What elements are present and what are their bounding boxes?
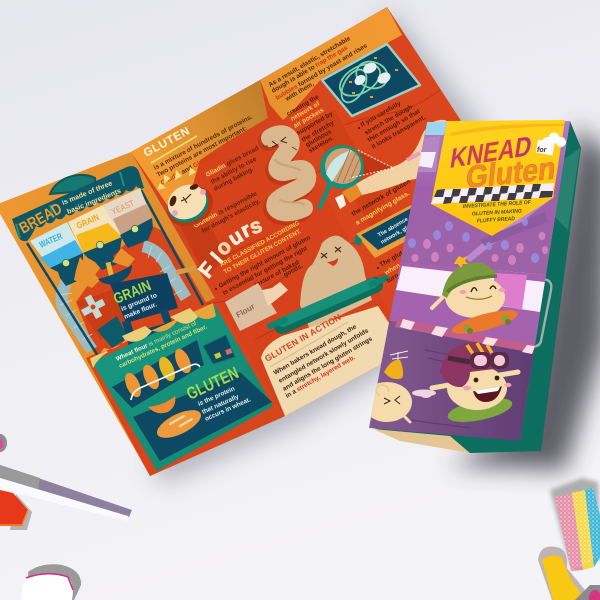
candy: marshmallow bbox=[22, 564, 81, 600]
text: is the protein bbox=[197, 385, 252, 423]
awning body bbox=[12, 166, 144, 241]
closed brochure bbox=[362, 120, 581, 453]
text: getting the right amount: texture of baked bbox=[254, 259, 300, 289]
text: if you carefully: stretch the dough bbox=[364, 104, 414, 137]
callout: the absence bbox=[354, 195, 445, 258]
cream scallops bbox=[90, 308, 198, 368]
text: the gluten when: turn bbox=[386, 272, 400, 285]
heading underline bbox=[270, 322, 348, 367]
windmill bbox=[81, 295, 105, 319]
green board bbox=[446, 393, 514, 427]
diagonal girder bbox=[465, 190, 555, 262]
bread heading awning bbox=[12, 166, 144, 241]
heading: Flours: l bbox=[207, 248, 228, 268]
market stall awning bbox=[90, 303, 216, 368]
banner highlights bbox=[450, 124, 564, 136]
text: gliadin: during baking. bbox=[213, 166, 255, 193]
face bbox=[384, 396, 400, 404]
text: when bakers knead: in a stretchy, layered web. bbox=[284, 354, 357, 400]
subtitle bbox=[463, 200, 532, 224]
hoppers bbox=[50, 218, 153, 286]
text: the gluten when bbox=[377, 246, 411, 285]
panel 3 top text: with them, bbox=[284, 81, 315, 103]
text: is the protein: is the protein bbox=[197, 385, 236, 408]
red fold shade bbox=[310, 110, 392, 226]
text: when bakers knead: When bakers knead dough, the bbox=[272, 323, 358, 377]
panel 2 heading: GLUTEN: GLUTEN bbox=[142, 125, 192, 160]
helmet bbox=[440, 342, 502, 387]
subtitle: FLUFFY BREAD bbox=[477, 216, 515, 224]
subheading: classified according: TO THEIR GLUTEN CONTENT. bbox=[223, 228, 303, 276]
icon: magnifying glass bbox=[320, 145, 393, 207]
face bbox=[463, 376, 512, 402]
candy: pink gummy bbox=[575, 585, 600, 600]
heading: Flours: F bbox=[194, 258, 220, 283]
text: if you carefully: If you carefully bbox=[360, 100, 402, 129]
callout: the absence: The absence of a bbox=[377, 210, 420, 239]
text: is the protein: occurs in wheat. bbox=[204, 396, 252, 423]
rotor bbox=[390, 351, 408, 360]
text: creating the network: creating the bbox=[286, 93, 321, 118]
cream page edge bbox=[373, 429, 470, 453]
text: gluten intro: is a mixture of hundreds of proteins. bbox=[153, 113, 254, 172]
text: creating the network: the stretchy bbox=[300, 119, 336, 144]
text: wheat flour: carbohydrates, protein and fiber. bbox=[118, 323, 209, 370]
grinder funnel bbox=[98, 265, 132, 284]
loaves bbox=[122, 346, 200, 400]
mill legs bbox=[122, 308, 175, 350]
panel 3 top text: As a result, elastic, stretchable bbox=[267, 35, 352, 89]
icon: dough with X eyes bbox=[300, 236, 372, 330]
text: the gluten when: The gluten bbox=[378, 246, 411, 269]
heading: GLUTEN: GLUTEN bbox=[184, 363, 242, 404]
box: gluten definition bbox=[133, 372, 272, 461]
panel: trapping gas background bbox=[260, 7, 480, 365]
text: gluten intro: Two proteins are most important: bbox=[156, 125, 248, 179]
sky corner bbox=[425, 122, 447, 135]
text: if you carefully: thin enough so that bbox=[366, 108, 422, 144]
text: getting the right amount: Getting the right amount of gluten bbox=[218, 234, 312, 290]
golden grain stream bbox=[106, 262, 114, 276]
drone cap bbox=[384, 360, 403, 379]
icon: flour bag bbox=[225, 282, 288, 331]
text: is made of three basic ingredients: is made of three bbox=[61, 180, 114, 207]
panel 3 top text: dough is able to trap the gas bbox=[270, 44, 349, 95]
orange header area of panel 2 bbox=[131, 80, 268, 212]
heading: BREAD: BREAD bbox=[17, 200, 65, 237]
white wall stripe bbox=[396, 266, 545, 312]
body bbox=[371, 382, 412, 422]
body bbox=[447, 366, 507, 410]
arm bbox=[403, 416, 412, 424]
heading: GRAIN: GRAIN bbox=[111, 277, 154, 308]
text: when bakers knead bbox=[272, 323, 374, 400]
text: creating the network: supported by bbox=[296, 110, 334, 137]
back of brochure: teal spine bbox=[373, 121, 581, 453]
text: if you carefully bbox=[358, 100, 427, 151]
grey pipes bbox=[61, 246, 186, 350]
tank: water: WATER bbox=[38, 231, 64, 250]
heading: Flours: s bbox=[246, 214, 265, 239]
text: the network of gluten: the network of gluten bbox=[350, 178, 412, 218]
kerb stripes bbox=[395, 318, 535, 353]
heading: gluten in action: GLUTEN IN ACTION bbox=[263, 312, 343, 364]
icon: rising yellow arrows bbox=[157, 167, 196, 190]
helmet stripes bbox=[467, 343, 492, 354]
text: gliadin: the ability to rise bbox=[210, 156, 258, 186]
spine shading bbox=[548, 148, 580, 230]
pompom bbox=[454, 256, 468, 268]
grid panel bbox=[203, 335, 235, 364]
goggles bbox=[448, 352, 509, 369]
awning sign dome bbox=[50, 175, 96, 194]
icon: stretchy dough ribbon bbox=[268, 134, 307, 215]
panel: ingredients background bbox=[0, 152, 283, 476]
candy: rainbow strip bbox=[550, 478, 600, 571]
tank: yeast bbox=[103, 188, 152, 237]
gluten strands and bubbles bbox=[334, 57, 398, 107]
support posts bbox=[27, 190, 203, 372]
candy: yellow gummy bear bbox=[538, 546, 585, 600]
icon: smiling dough ball bbox=[160, 178, 220, 234]
small mill house bbox=[97, 316, 128, 348]
drop shadows bbox=[150, 12, 600, 484]
title: Gluten: Gluten bbox=[464, 150, 557, 195]
text: when bakers knead: entangled network slowly unfolds bbox=[278, 327, 370, 385]
candy: red gummy bbox=[0, 490, 32, 530]
mill crank handle bbox=[178, 268, 194, 272]
elastic strap bbox=[530, 279, 551, 346]
cover lower dark road bbox=[369, 320, 535, 441]
tank: grain bbox=[68, 205, 122, 253]
text: is ground to make flour: is ground to bbox=[120, 292, 158, 313]
heading: Flours: r bbox=[237, 218, 254, 243]
title: KNEAD: KNEAD bbox=[448, 130, 534, 174]
numbered markers bbox=[62, 225, 139, 267]
tank: grain: GRAIN bbox=[75, 212, 101, 231]
panel 3 top text: bubbles formed by yeast and rises bbox=[274, 42, 369, 102]
title banner bbox=[431, 120, 566, 236]
icon: gluten network board bbox=[322, 44, 420, 116]
text: gluten intro: Gliadin and Glutenin. bbox=[160, 150, 220, 187]
icon: chef hat with for: for bbox=[537, 147, 548, 154]
text: creating the network: skeleton. bbox=[308, 135, 335, 155]
candy: pen straw bbox=[0, 465, 132, 521]
text: is made of three basic ingredients: basic ingredients bbox=[66, 188, 122, 216]
text: creating the network: network of bbox=[290, 100, 322, 123]
text: gliadin: Gliadin gives bread bbox=[205, 145, 260, 179]
motion clouds bbox=[412, 390, 436, 398]
text: glutenin: for dough's elasticity. bbox=[201, 198, 262, 235]
tank: yeast: YEAST bbox=[110, 198, 136, 217]
open brochure inside bbox=[0, 7, 480, 476]
heading: Flours: o bbox=[211, 235, 236, 260]
body bbox=[445, 276, 505, 318]
beanie bbox=[442, 263, 497, 298]
text: if you carefully: it looks transparent, bbox=[370, 114, 427, 151]
heading: Flours: u bbox=[224, 224, 247, 251]
text: glutenin: Glutenin is responsible bbox=[193, 190, 259, 230]
face bbox=[466, 286, 496, 299]
arms bbox=[432, 290, 495, 318]
box: bread loaves bbox=[112, 340, 204, 408]
panel: wheat flour and gluten bbox=[90, 303, 273, 471]
orange peaks bbox=[74, 248, 135, 288]
text: creating the network: air pockets bbox=[292, 107, 326, 130]
text: the gluten when: when bbox=[383, 262, 402, 277]
arms bbox=[432, 372, 518, 388]
candy: small pink bbox=[0, 434, 7, 452]
icon: rolling pin bbox=[270, 278, 386, 326]
text: getting the right amount: goods. bbox=[283, 263, 305, 279]
pipe ribs bbox=[60, 246, 182, 340]
character: drone dough bbox=[371, 350, 412, 424]
text: wheat flour: Wheat flour is mainly consist of bbox=[115, 320, 198, 363]
pink door bbox=[490, 273, 527, 310]
icon: dough arm stretched bbox=[335, 120, 465, 209]
text: is ground to make flour: make flour. bbox=[123, 301, 158, 321]
half bun bbox=[148, 396, 175, 413]
awning fringe marks bbox=[16, 172, 124, 238]
polka dots bbox=[408, 218, 539, 263]
purple building bbox=[417, 136, 440, 172]
cover background bbox=[400, 121, 570, 275]
heading: Flours bbox=[194, 214, 265, 283]
mill box bbox=[110, 273, 178, 323]
panel: gluten and flours background bbox=[131, 80, 409, 417]
cover floor bbox=[385, 262, 548, 345]
subheading: classified according: ARE CLASSIFIED ACCORDING bbox=[219, 220, 301, 269]
red block behind windmill bbox=[77, 290, 126, 340]
text: the network of gluten: a magnifying glass. bbox=[354, 190, 411, 227]
cheeks bbox=[460, 288, 506, 294]
tank: water bbox=[30, 222, 83, 268]
text: creating the network: glutinous bbox=[304, 128, 333, 149]
cover art bbox=[369, 121, 570, 441]
character: helmet dough bbox=[412, 342, 518, 427]
text: creating the network bbox=[286, 93, 336, 155]
baguette bbox=[153, 404, 205, 444]
text: getting the right amount: is essential for getting the right bbox=[222, 245, 309, 297]
red base under the stall bbox=[86, 298, 283, 476]
orange header area of panel 3 bbox=[260, 7, 402, 120]
checker strip bbox=[431, 183, 554, 204]
text: is the protein: that naturally bbox=[201, 393, 240, 416]
callout: the absence: network, gluten bbox=[380, 220, 419, 246]
icon: ribbon face bbox=[262, 137, 297, 150]
panel: gluten in action bbox=[261, 278, 400, 416]
subtitle: GLUTEN IN MAKING bbox=[472, 208, 523, 217]
skateboard bbox=[450, 305, 520, 339]
speed lines bbox=[410, 350, 470, 428]
subtitle: INVESTIGATE THE ROLE OF bbox=[463, 200, 532, 210]
icon: flour bag: Flour bbox=[234, 302, 256, 320]
hair curl bbox=[376, 385, 388, 396]
wood grain lines bbox=[175, 90, 440, 340]
character: skater dough bbox=[432, 256, 520, 339]
pink polka dots bbox=[412, 232, 548, 265]
darker shadow along fold bbox=[180, 218, 228, 273]
panel 1: red mill area bbox=[76, 225, 215, 362]
heading underline bbox=[151, 136, 197, 163]
text: when bakers knead: and aligns the long gluten strings bbox=[282, 335, 374, 393]
